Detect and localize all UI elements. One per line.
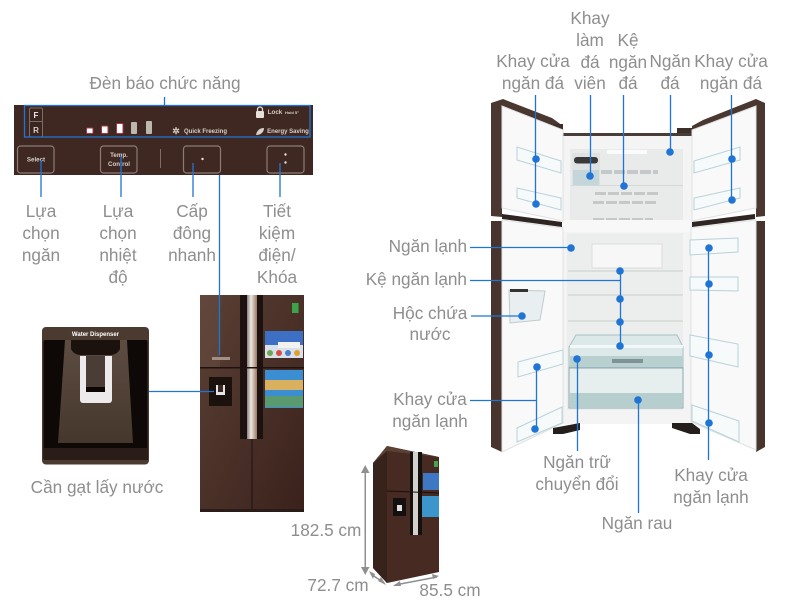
label: conversion compartment: Ngăn trữ xyxy=(543,452,611,472)
label: select temperature: độ xyxy=(108,267,128,287)
freezer shelf xyxy=(571,184,683,186)
leader lines: open fridge xyxy=(470,95,732,513)
dispenser xyxy=(209,377,232,406)
label: freezer compartment: đá xyxy=(660,73,680,93)
upper right door xyxy=(692,106,756,221)
label: fridge door tray left: ngăn lạnh xyxy=(392,411,468,431)
label: select compartment: Lựa xyxy=(26,201,57,221)
label: freezer shelf: Kệ xyxy=(617,30,639,50)
label: freezer compartment: Ngăn xyxy=(649,51,691,71)
lock indicator: Lock xyxy=(268,109,283,116)
quick freezing button xyxy=(184,146,220,173)
label: fridge door tray left: Khay cửa xyxy=(393,389,467,409)
label: select compartment: chọn xyxy=(22,223,60,243)
label: freezer door tray right: Khay cửa xyxy=(694,51,768,71)
temp control button: Temp. xyxy=(110,152,128,159)
width label: 85.5 cm xyxy=(419,580,481,600)
label: select temperature: nhiệt xyxy=(99,245,137,265)
feet xyxy=(200,509,304,512)
energy saving indicator xyxy=(256,128,309,135)
label: freezer door tray left: ngăn đá xyxy=(502,73,564,93)
label: quick freezing: đông xyxy=(173,223,211,243)
fridge body xyxy=(373,446,439,583)
dispenser leader line xyxy=(149,390,214,392)
F/R indicator xyxy=(30,108,42,137)
label: freezer shelf: đá xyxy=(618,73,638,93)
lower right door xyxy=(690,220,756,450)
leader lines: control buttons xyxy=(41,156,280,197)
ice maker xyxy=(572,153,600,185)
F/R indicator: F xyxy=(34,111,39,120)
hinge bars xyxy=(502,214,755,227)
freezer back vents xyxy=(593,172,658,219)
upper left door xyxy=(502,106,563,221)
label: ice tray: viên xyxy=(574,73,606,93)
energy label xyxy=(292,303,298,313)
depth arrow xyxy=(369,571,386,585)
label: fridge door tray right: Khay cửa xyxy=(674,465,748,485)
lock indicator: Hold 5" xyxy=(285,110,299,115)
label: select compartment: ngăn xyxy=(22,245,60,265)
lock indicator xyxy=(256,107,299,118)
label: fridge shelves: Kệ ngăn lạnh xyxy=(366,269,467,289)
label: water tank: Hộc chứa xyxy=(393,303,468,323)
label: freezer door tray right: ngăn đá xyxy=(700,73,762,93)
width arrow xyxy=(393,574,439,586)
label: water lever: Cần gạt lấy nước xyxy=(31,477,164,497)
temperature level lights xyxy=(86,121,152,134)
select button xyxy=(18,146,54,173)
heading: indicator lights: Đèn báo chức năng xyxy=(89,73,241,93)
control panel xyxy=(14,105,313,175)
label: energy saving / lock: Tiết xyxy=(263,201,291,221)
water tank xyxy=(509,289,545,323)
conversion drawer xyxy=(569,335,683,367)
height arrow xyxy=(361,465,370,575)
label: quick freezing: Cấp xyxy=(176,201,208,221)
label: water tank: nước xyxy=(410,324,451,344)
quick freezing indicator: Quick Freezing xyxy=(184,129,227,135)
label: ice tray: Khay xyxy=(570,8,610,28)
select button: Select xyxy=(27,156,45,164)
door backs xyxy=(491,99,563,217)
water dispenser detail xyxy=(42,327,149,464)
lever housing xyxy=(58,340,133,443)
label: fridge door tray right: ngăn lạnh xyxy=(673,487,749,507)
fridge shelves xyxy=(568,271,683,321)
open fridge xyxy=(491,99,765,452)
feet xyxy=(553,423,700,434)
panel-to-fridge leader line xyxy=(218,175,220,355)
quick freezing indicator xyxy=(172,126,227,136)
label: ice tray: đá xyxy=(580,52,600,72)
label: vegetable compartment: Ngăn rau xyxy=(602,513,672,533)
energy saving indicator: Energy Saving xyxy=(267,129,309,135)
temp control button: Control xyxy=(108,161,130,168)
indicator bracket xyxy=(24,97,310,137)
tray xyxy=(44,448,148,460)
door poster upper xyxy=(265,331,303,358)
door control icons xyxy=(212,357,230,360)
door poster lower xyxy=(265,370,303,408)
depth label: 72.7 cm xyxy=(307,575,369,595)
label: select temperature: Lựa xyxy=(103,201,134,221)
marker dots xyxy=(518,148,736,433)
quick freezing indicator: ✲ xyxy=(172,126,180,136)
energy saving button xyxy=(267,146,304,173)
label: freezer shelf: ngăn xyxy=(609,52,647,72)
lower left door xyxy=(502,220,563,452)
label: ice tray: làm xyxy=(576,30,604,50)
label: energy saving / lock: kiệm xyxy=(259,223,295,243)
fridge back panel xyxy=(592,244,662,268)
cabinet xyxy=(563,133,692,424)
F/R indicator: R xyxy=(33,126,39,135)
chrome lever xyxy=(80,356,112,403)
vegetable drawer xyxy=(569,368,683,408)
label: freezer door tray left: Khay cửa xyxy=(496,51,570,71)
label: energy saving / lock: Khóa xyxy=(257,267,298,287)
height label: 182.5 cm xyxy=(291,520,361,540)
label: quick freezing: nhanh xyxy=(168,245,216,265)
small fridge with dimensions xyxy=(291,446,481,600)
water dispenser detail: Water Dispenser xyxy=(72,332,120,338)
label: energy saving / lock: điện/ xyxy=(258,245,296,265)
label: conversion compartment: chuyển đổi xyxy=(535,474,619,494)
closed fridge front xyxy=(200,295,304,512)
label: fridge compartment: Ngăn lạnh xyxy=(389,236,467,256)
label: select temperature: chọn xyxy=(99,223,137,243)
temp control button xyxy=(100,146,137,173)
